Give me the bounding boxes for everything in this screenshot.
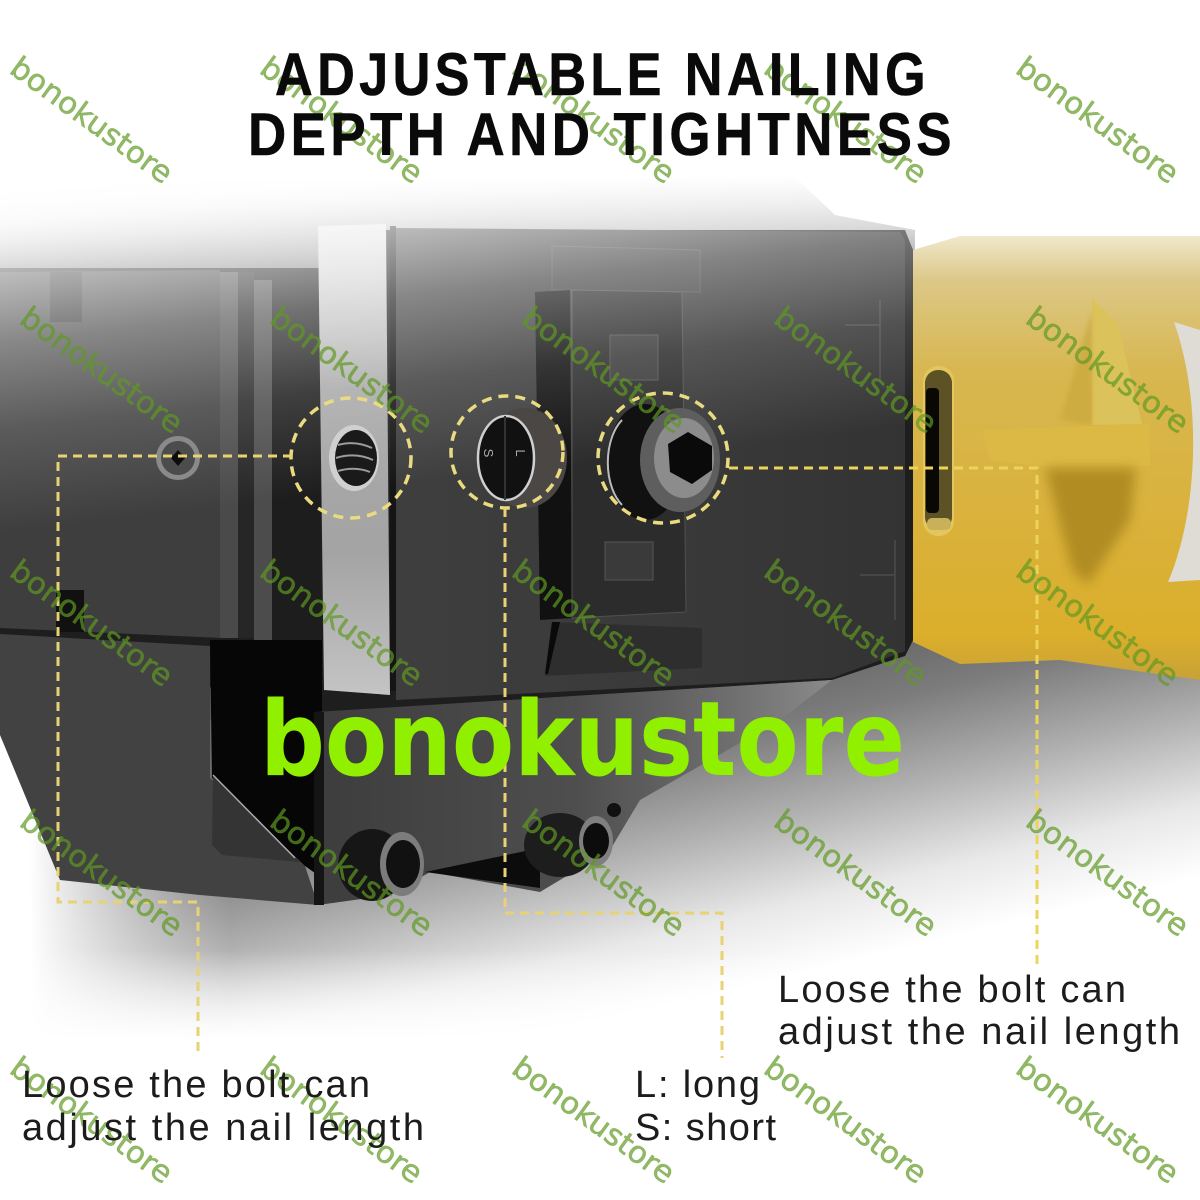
dark machine base bbox=[0, 230, 913, 712]
housing rib bbox=[982, 298, 1150, 585]
dashed callout: selector knob bbox=[451, 396, 722, 1058]
caption: long and short: L: long bbox=[635, 1064, 760, 1106]
lower left body bbox=[0, 634, 322, 905]
watermarks: bonokustore bbox=[1009, 553, 1185, 694]
upper left block bbox=[0, 270, 320, 702]
title: ADJUSTABLE NAILING bbox=[275, 41, 930, 108]
L/S selector knob: L bbox=[513, 449, 528, 457]
caption: bolt left bbox=[22, 1064, 424, 1149]
dashed callout: hex bolt bbox=[598, 393, 1037, 970]
watermarks: bonokustore bbox=[253, 50, 429, 191]
title bbox=[248, 41, 956, 168]
watermarks: bonokustore bbox=[757, 553, 933, 694]
watermarks: bonokustore bbox=[1019, 300, 1195, 441]
watermarks: bonokustore bbox=[1019, 803, 1195, 944]
watermarks: bonokustore bbox=[515, 803, 691, 944]
watermarks: bonokustore bbox=[505, 553, 681, 694]
main body right bbox=[396, 228, 913, 700]
L/S selector knob: S bbox=[481, 449, 496, 458]
lower bolt right bbox=[524, 803, 621, 877]
watermarks: bonokustore bbox=[505, 1050, 681, 1191]
caption: bolt right bbox=[778, 969, 1180, 1053]
caption: bolt right: Loose the bolt can bbox=[778, 969, 1126, 1011]
title: DEPTH AND TIGHTNESS bbox=[248, 101, 956, 168]
watermarks: bonokustore bbox=[3, 50, 179, 191]
watermarks: bonokustore bbox=[767, 300, 943, 441]
watermarks: bonokustore bbox=[13, 803, 189, 944]
caption: long and short bbox=[635, 1064, 776, 1149]
L/S selector knob bbox=[478, 408, 567, 508]
caption: bolt left: adjust the nail length bbox=[22, 1107, 424, 1149]
threaded hole bbox=[329, 425, 379, 491]
caption: long and short: S: short bbox=[635, 1107, 776, 1149]
white fade at bottom of shadow bbox=[0, 950, 1200, 1200]
silver strip bbox=[318, 224, 396, 695]
caption: bolt right: adjust the nail length bbox=[778, 1011, 1180, 1053]
watermarks: bonokustore bbox=[253, 553, 429, 694]
watermarks: bonokustore bbox=[1009, 50, 1185, 191]
housing label bbox=[1168, 322, 1200, 582]
white fade at left of shadow bbox=[0, 720, 240, 1200]
watermarks: bonokustore bbox=[505, 50, 681, 191]
yellow motor housing bbox=[913, 236, 1200, 680]
large brand text: bonokustore bbox=[260, 680, 905, 800]
watermarks: bonokustore bbox=[3, 1050, 179, 1191]
watermarks: bonokustore bbox=[515, 300, 691, 441]
slot in housing bbox=[923, 366, 954, 536]
watermarks: bonokustore bbox=[757, 50, 933, 191]
watermarks: bonokustore bbox=[13, 300, 189, 441]
floor shadow bbox=[0, 640, 1200, 1200]
top bracket bbox=[0, 172, 915, 300]
fade overlay at top bbox=[0, 0, 1200, 640]
watermarks: bonokustore bbox=[757, 1050, 933, 1191]
watermarks: bonokustore bbox=[263, 300, 439, 441]
watermarks: bonokustore bbox=[1009, 1050, 1185, 1191]
small screw left bbox=[156, 436, 200, 480]
hex bolt bbox=[607, 404, 720, 520]
watermarks: bonokustore bbox=[263, 803, 439, 944]
lower bolt left bbox=[338, 829, 424, 901]
adjuster bracket bbox=[535, 246, 702, 676]
caption: bolt left: Loose the bolt can bbox=[22, 1064, 370, 1106]
dashed callout: threaded hole bbox=[58, 398, 411, 1052]
lower front plate bbox=[314, 680, 832, 905]
watermarks: bonokustore bbox=[3, 553, 179, 694]
watermarks: bonokustore bbox=[253, 1050, 429, 1191]
watermarks: bonokustore bbox=[767, 803, 943, 944]
